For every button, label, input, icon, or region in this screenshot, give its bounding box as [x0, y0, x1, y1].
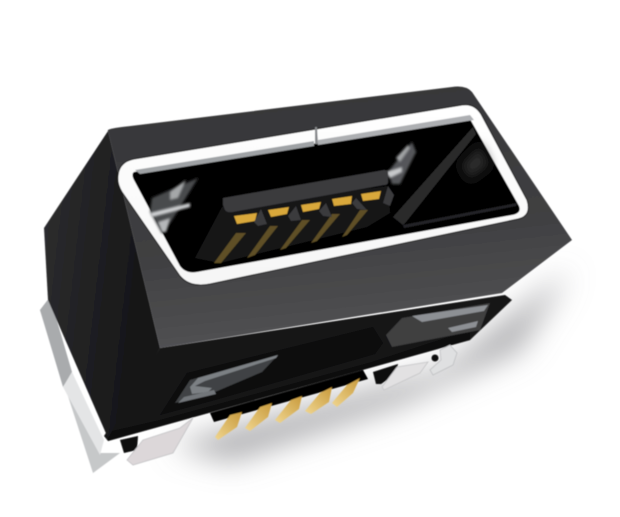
pin 1: [215, 412, 242, 440]
left solder tab: [127, 418, 193, 465]
contact tongue: [195, 170, 394, 263]
left latch window: [175, 355, 278, 403]
left reflective contact: [150, 178, 198, 234]
tongue top bar: [223, 170, 388, 212]
small right metal tab: [430, 345, 457, 375]
pin 3: [275, 396, 302, 423]
socket opening: [132, 115, 520, 272]
tongue lower body: [195, 186, 390, 263]
gold contact strips: [214, 210, 368, 263]
body underside: [104, 295, 512, 441]
left solder foot: [120, 436, 138, 453]
small right foot: [432, 354, 438, 362]
ring inner lip: [135, 141, 314, 174]
pin 4: [305, 387, 332, 414]
right solder tab: [382, 362, 428, 390]
left metal shield: [40, 297, 120, 473]
pin 5: [332, 378, 360, 407]
gold pins: [215, 378, 360, 440]
right latch window: [386, 303, 490, 347]
whole connector: [40, 87, 572, 473]
white metal ring: [118, 105, 528, 285]
pin 2: [245, 403, 272, 431]
right reflective contact: [388, 142, 416, 184]
interior right wall: [393, 127, 476, 225]
right solder foot: [373, 364, 398, 384]
pin housing strip: [210, 370, 368, 422]
tongue teeth: [254, 186, 394, 226]
gold tips: [234, 191, 381, 224]
recess under body: [160, 327, 383, 415]
body front face: [108, 87, 572, 348]
body left side face: [44, 131, 160, 438]
drop shadow on ground: [170, 270, 570, 462]
